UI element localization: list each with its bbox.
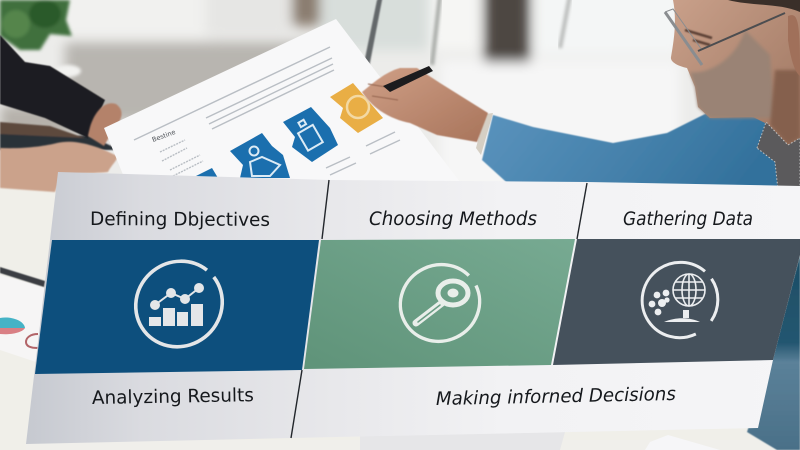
man's jacket lower right xyxy=(747,255,800,450)
hair xyxy=(728,0,800,12)
vase xyxy=(55,65,81,77)
panel: defining objectives label: Defining Dbjectives xyxy=(90,209,270,231)
panel: gathering data xyxy=(553,239,800,365)
writing hand xyxy=(362,68,488,142)
panel: gathering data label: Gathering Data xyxy=(623,209,753,230)
blue icon: person xyxy=(230,133,290,178)
panel: making informed decisions label: Making inforned Decisions xyxy=(436,384,676,410)
man's head xyxy=(665,0,800,145)
panel: choosing methods label: Choosing Methods xyxy=(369,209,537,230)
panel: choosing methods xyxy=(304,239,575,369)
pie chart xyxy=(0,317,25,334)
left person's black sleeve xyxy=(0,35,105,138)
panel: analyzing results label: Analyzing Results xyxy=(92,385,254,409)
icon: magnifier in ring xyxy=(387,251,493,355)
icon: chart in ring xyxy=(118,244,240,364)
panel: analyzing results xyxy=(35,240,319,374)
man's shoulder and sleeve xyxy=(482,113,785,190)
document heading: Bestine xyxy=(151,128,177,144)
ring chart xyxy=(26,334,38,348)
table xyxy=(0,187,800,450)
left person's wrist and hand xyxy=(88,103,122,146)
document with icons xyxy=(104,19,460,182)
neck shading xyxy=(770,70,800,145)
checked shirt collar xyxy=(757,122,800,190)
document text lines xyxy=(134,47,400,176)
pen on table xyxy=(0,267,45,287)
blue icon: bottle xyxy=(283,107,338,162)
beard shading xyxy=(690,30,775,118)
icon: globe in ring xyxy=(628,248,732,352)
bottom table objects xyxy=(26,432,776,450)
pen xyxy=(383,66,433,92)
column divider one xyxy=(291,180,329,438)
eye and brow xyxy=(685,30,712,45)
chart paper on table xyxy=(0,275,46,362)
ear xyxy=(788,15,800,76)
glasses xyxy=(665,9,785,65)
plant xyxy=(0,0,72,50)
left person's forearm and hand xyxy=(0,142,117,192)
process board xyxy=(26,172,800,444)
amber icon xyxy=(330,83,383,133)
wristband xyxy=(476,113,493,155)
column divider two xyxy=(577,183,587,239)
chair xyxy=(0,122,120,150)
small blue icon xyxy=(192,168,218,178)
